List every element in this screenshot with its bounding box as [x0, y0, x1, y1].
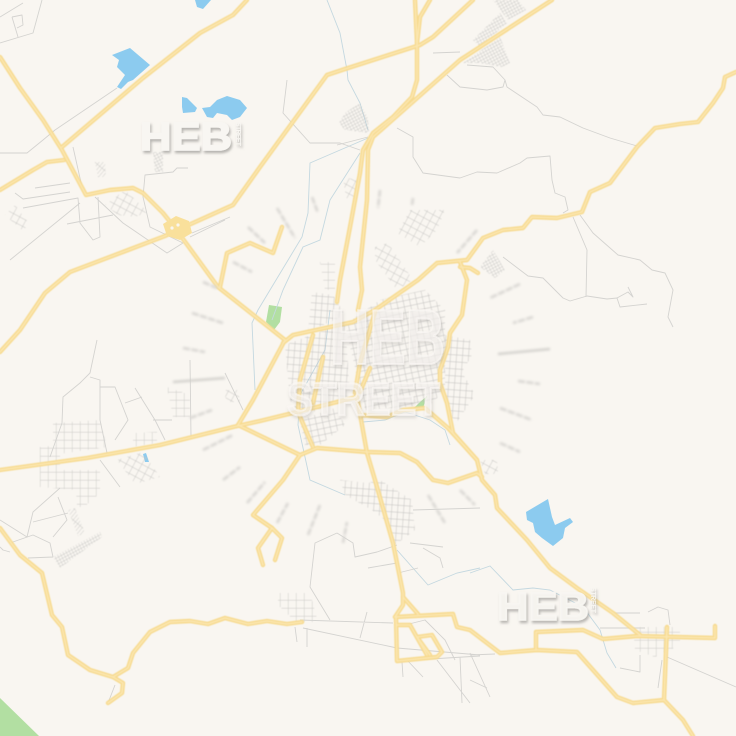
lake: small pond	[182, 97, 197, 113]
watermark: central logo	[287, 293, 445, 425]
roundabout	[163, 216, 192, 240]
north downtown grid	[308, 292, 345, 332]
pond: west town	[143, 453, 149, 462]
logo word HEB: HEB	[330, 293, 445, 381]
south town grid	[340, 480, 415, 545]
logo word STREET: STREET	[287, 373, 440, 425]
forest: south-west corner	[0, 698, 39, 736]
north-west grids	[5, 205, 30, 230]
lake: south-east	[526, 499, 573, 546]
watermark: south-east: STREET	[589, 587, 596, 614]
south downtown grid	[300, 408, 345, 445]
park: east of centre	[414, 396, 427, 408]
hatched subdivision west	[53, 532, 102, 568]
lake: north-west	[112, 48, 150, 89]
watermark: south-east: HEB	[497, 585, 589, 629]
lake: top edge	[195, 0, 211, 9]
parks and green areas	[0, 305, 427, 736]
water bodies	[112, 0, 573, 546]
watermark: north-west: STREET	[234, 122, 241, 147]
southern village grid	[278, 593, 318, 622]
lake: twin pond	[202, 96, 247, 120]
west town grids	[40, 445, 100, 507]
downtown west grid	[285, 322, 350, 418]
blurred radial tick marks around centre	[183, 190, 540, 543]
north-east of centre grids	[397, 210, 445, 247]
park: north-west of centre	[266, 305, 282, 330]
rivers and streams	[252, 0, 616, 668]
downtown east grid	[345, 290, 445, 410]
north centre grids	[339, 103, 369, 133]
east edge grid	[445, 335, 475, 425]
strong tick marks	[173, 349, 550, 382]
eastern village grid	[633, 627, 680, 657]
watermark: north-west: HEB	[140, 115, 232, 159]
